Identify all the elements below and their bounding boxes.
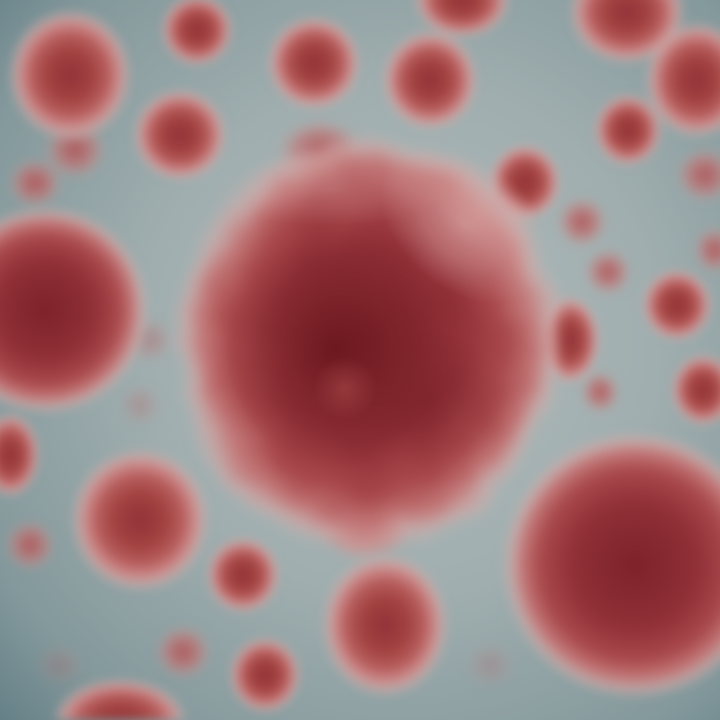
small background cells [4,118,720,689]
cell body [172,131,564,555]
cell: left large [0,206,149,414]
highlight on upper edge [210,154,450,226]
dark lobe right [350,330,510,470]
cell: lower right large [501,431,720,699]
central spot [313,356,377,420]
dark core [225,230,445,470]
bottom bud [317,500,413,560]
highlight on upper right [350,114,580,336]
cell: central large [172,114,580,560]
